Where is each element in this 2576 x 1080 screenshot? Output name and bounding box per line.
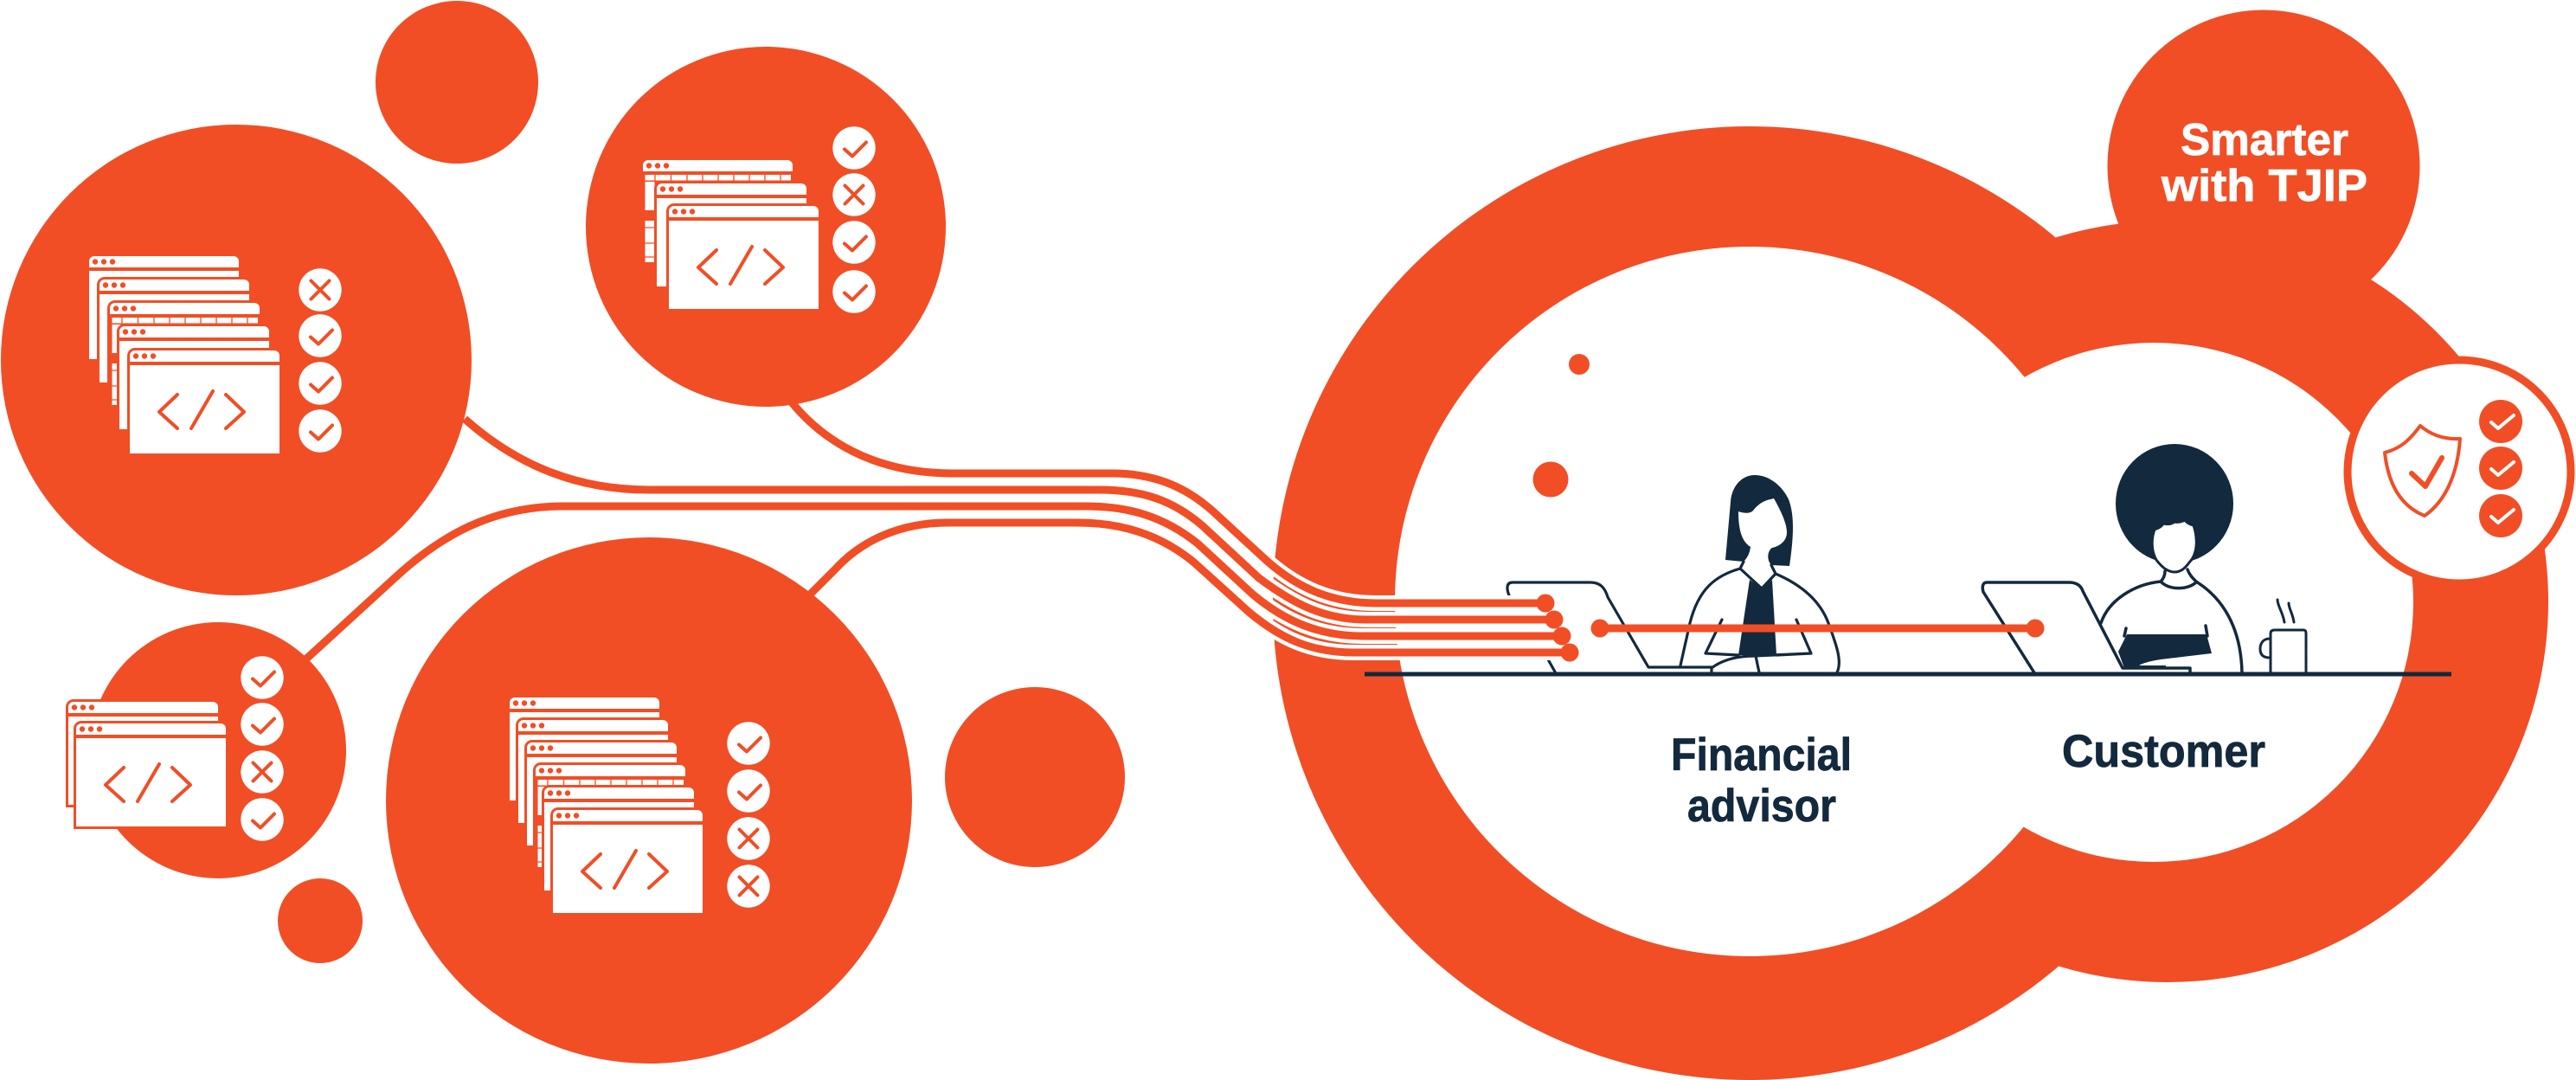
illustration: customer with laptop xyxy=(1982,444,2306,674)
check list xyxy=(832,126,876,313)
cloud outer right lobe xyxy=(1787,221,2548,982)
check list xyxy=(299,268,342,453)
customer shirt straps xyxy=(2124,626,2207,636)
label: Financial advisor xyxy=(1671,730,1852,832)
label: Smarter with TJIP xyxy=(2161,115,2367,211)
panel: top middle system circle xyxy=(586,47,946,407)
connector 4 xyxy=(809,523,1570,652)
label: Smarter with TJIP: with TJIP xyxy=(2161,161,2367,211)
customer shirt xyxy=(2118,634,2212,668)
badge: Smarter with TJIP circle xyxy=(2108,10,2419,322)
cloud inner left lobe xyxy=(1395,247,2104,956)
wires: orange connectors xyxy=(303,402,1570,662)
advisor laptop xyxy=(1507,582,1712,673)
advisor arms xyxy=(1706,620,1811,672)
windows stack xyxy=(87,254,279,456)
customer face xyxy=(2152,520,2196,572)
desk line xyxy=(1365,672,2451,677)
connector end dots xyxy=(1537,594,1578,661)
customer hair xyxy=(2116,444,2233,563)
windows stack xyxy=(507,695,703,916)
check list xyxy=(2479,400,2522,537)
illustration: financial advisor with laptop xyxy=(1507,475,1839,673)
windows stack xyxy=(640,158,819,312)
cloud inner right lobe xyxy=(1894,343,2413,862)
decorative circle lower left xyxy=(278,878,363,963)
panel: cloud ring around meeting xyxy=(1273,10,2548,1080)
connector 3 xyxy=(303,506,1562,662)
label: Smarter with TJIP: Smarter xyxy=(2181,115,2348,165)
windows stack xyxy=(66,699,226,829)
decorative circle top xyxy=(376,1,538,164)
decorative dot medium xyxy=(1533,462,1568,497)
label: Customer: Customer xyxy=(2062,726,2265,777)
icon: coffee mug xyxy=(2260,600,2306,672)
check list xyxy=(727,722,770,908)
panel: large bottom system circle xyxy=(386,537,912,1064)
icon: shield xyxy=(2385,426,2460,516)
connector 1 xyxy=(792,402,1545,603)
decorative circle right of bottom xyxy=(945,687,1125,867)
cloud outer left lobe xyxy=(1273,126,2226,1080)
decorative dot small xyxy=(1569,354,1590,375)
advisor shirt xyxy=(1738,580,1776,655)
advisor jacket xyxy=(1680,562,1839,672)
panel: small lower-left system circle xyxy=(66,622,346,878)
customer body and neck xyxy=(2101,569,2242,673)
connector 2 xyxy=(465,419,1554,620)
panel: large left system circle xyxy=(1,125,472,595)
check list xyxy=(241,656,284,841)
label: Financial advisor: Financial xyxy=(1671,730,1852,781)
link between advisor and customer xyxy=(1590,620,2044,637)
label: Financial advisor: advisor xyxy=(1687,781,1836,832)
wires: white halos xyxy=(952,473,1570,652)
advisor hair xyxy=(1725,475,1793,566)
panel: shield compliance circle xyxy=(2348,360,2571,583)
customer laptop xyxy=(1982,582,2190,674)
